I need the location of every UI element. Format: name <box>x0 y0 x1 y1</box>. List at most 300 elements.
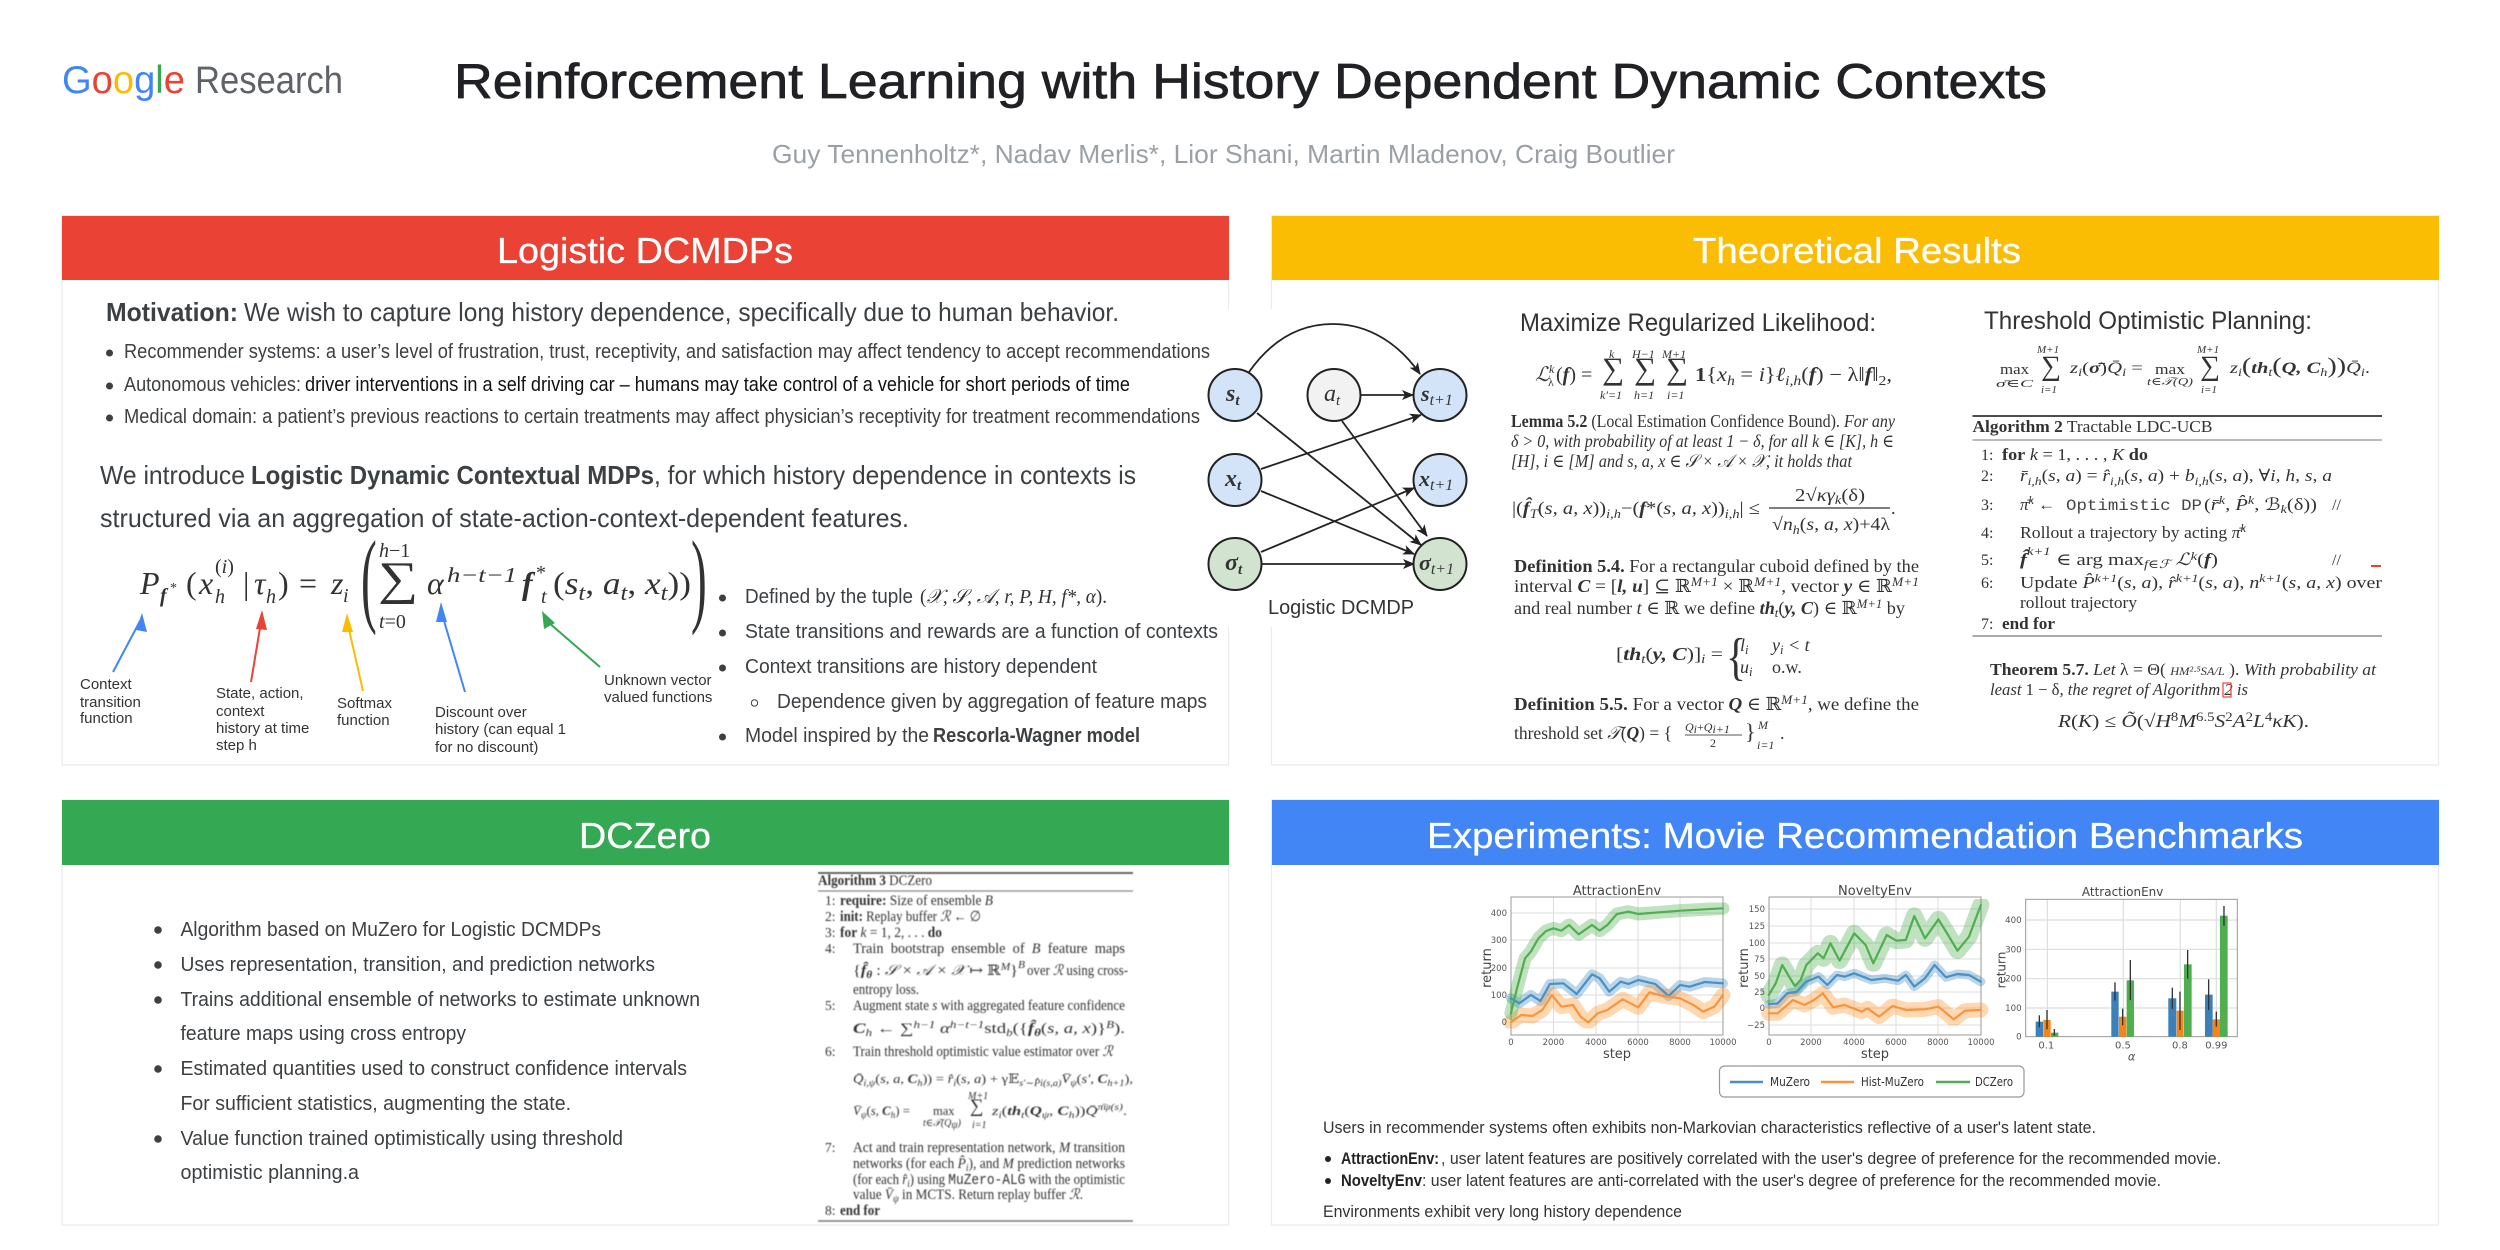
algorithm: Tractable LDC-UCB: k <box>2219 493 2226 507</box>
annotation: discount over history: for no discount) <box>435 739 538 756</box>
formula: threshold optimistic planning: t <box>2268 367 2273 379</box>
bullet list: motivation examples: Medical domain: a patient’s previous reactions to certain treatments may affect physician’s receptivity for treatment recommendations <box>124 406 1200 428</box>
algorithm: Tractable LDC-UCB: // <box>2332 497 2341 514</box>
heading: Theoretical Results: Theoretical Results <box>1693 230 2021 271</box>
bullet list: motivation examples: Autonomous vehicles: <box>124 374 301 396</box>
algorithm: Tractable LDC-UCB: π̄ <box>2020 495 2029 514</box>
text: Definition 5.4: M+1 <box>1856 597 1882 611</box>
text: Definition 5.4: and real number t ∈ ℝ we define th <box>1514 598 1775 618</box>
bar chart axis labels: 200 <box>2005 975 2022 985</box>
formula: threshold optimistic planning: i=1 <box>2201 384 2217 396</box>
line chart: AttractionEnv <box>1480 884 1737 1062</box>
algorithm: DCZero: ({ <box>1013 1021 1028 1037</box>
title: Reinforcement Learning with History Dependent Dynamic Contexts <box>454 55 2047 109</box>
algorithm: Tractable LDC-UCB: k+1 <box>2176 571 2198 585</box>
algorithm: DCZero: (for each r̂ <box>853 1172 908 1188</box>
algorithm: DCZero: Algorithm 3 DCZero <box>818 873 932 889</box>
text: Definition 5.4: M+1 <box>1753 575 1781 589</box>
algorithm: Tractable LDC-UCB: f) <box>2204 550 2217 569</box>
algorithm: DCZero: i <box>953 1078 957 1088</box>
algorithm: DCZero: max <box>933 1104 955 1118</box>
panel header: Logistic DCMDPs <box>62 216 1229 280</box>
line chart: AttractionEnv: 400 <box>1491 909 1507 919</box>
bar chart: AttractionEnv by alpha <box>1994 885 2237 1064</box>
algorithm: DCZero: f̂ <box>1028 1019 1037 1037</box>
algorithm: DCZero: s, a, C <box>880 1071 916 1086</box>
algorithm: DCZero: ) = <box>895 1103 910 1118</box>
bullet list: motivation examples <box>106 341 1210 428</box>
algorithm: Tractable LDC-UCB: k <box>2191 549 2198 563</box>
algorithm: DCZero: ψ <box>1070 1078 1077 1088</box>
bullet list: motivation examples: Recommender systems: a user’s level of frustration, trust, receptivity, and satisfaction may affect tendency to accept recommendations <box>124 341 1210 363</box>
algorithm: DCZero: entropy loss. <box>853 982 919 998</box>
line chart: NoveltyEnv: 6000 <box>1885 1038 1907 1048</box>
algorithm: DCZero: 8: <box>825 1203 836 1218</box>
algorithm: Tractable LDC-UCB: end for <box>2002 614 2055 633</box>
annotation: context transition function: function <box>80 710 133 727</box>
formula: threshold optimistic planning <box>1996 344 2370 396</box>
formula: threshold optimistic planning: M+1 <box>2196 344 2219 356</box>
algorithm: DCZero: ψ <box>893 1194 899 1205</box>
algorithm: DCZero: require: Size of ensemble B <box>840 893 993 909</box>
legend: MuZero <box>1770 1075 1810 1089</box>
line chart: NoveltyEnv: 100 <box>1749 939 1765 949</box>
algorithm: Tractable LDC-UCB: s, a), ∀i, h, s, a <box>2215 466 2324 485</box>
annotation: discount over history <box>435 704 566 756</box>
text: Definition 5.4: y ∈ ℝ <box>1844 576 1890 596</box>
text: introduction of Logistic Dynamic Contextual MDPs: Logistic Dynamic Contextual MDPs <box>251 460 654 490</box>
text: Definition 5.5: , we define the <box>1808 694 1919 714</box>
text: Lemma 5.2: [H], i ∈ [M] and s, a, x ∈ 𝒮 × 𝒜 × 𝒳, it holds that <box>1511 451 1853 471</box>
formula: context transition: h <box>215 586 225 608</box>
formula: threshold optimistic planning: ∑ <box>2200 351 2220 382</box>
graph node labels: t <box>1238 562 1243 578</box>
formula: threshold optimistic planning: max <box>2155 362 2186 378</box>
algorithm: DCZero: init: Replay buffer ℛ ← ∅ <box>840 909 981 925</box>
algorithm: DCZero: Q̄ <box>853 1071 864 1086</box>
bar chart axis labels <box>1994 885 2227 1064</box>
algorithm: Tractable LDC-UCB <box>1972 416 2382 636</box>
bullet list: DCZero: feature maps using cross entropy <box>180 1023 466 1045</box>
formula: threshold optimistic planning: M+1 <box>2036 344 2059 356</box>
arrow: state, action, context history <box>251 610 267 682</box>
algorithm: DCZero: ( <box>875 1071 880 1086</box>
text: Theorem 5.7: 6.5 <box>2196 710 2215 724</box>
algorithm: DCZero: h <box>1069 1110 1075 1120</box>
algorithm: Tractable LDC-UCB: f̂ <box>2020 549 2030 569</box>
algorithm: DCZero: θ <box>1034 1028 1042 1039</box>
formula: context transition: , <box>585 565 603 601</box>
formula: threshold vector: o.w. <box>1772 657 1802 677</box>
algorithm: Tractable LDC-UCB: 4: <box>1981 525 1993 542</box>
text: Definition 5.5: Q <box>1685 720 1694 734</box>
algorithm: Tractable LDC-UCB: s, a) + b <box>2131 466 2193 485</box>
formula: context transition: τ <box>254 565 267 601</box>
formula: confidence bound inequality: h <box>1793 523 1800 537</box>
line chart: AttractionEnv: 100 <box>1491 991 1507 1001</box>
text: experiment description: Users in recommender systems often exhibits non-Markovian characteristics reflective of a user's latent state. <box>1323 1118 2096 1137</box>
algorithm: DCZero: Q̄ <box>1085 1103 1098 1118</box>
bullet list: DCZero: optimistic planning.a <box>180 1162 360 1184</box>
formula: context transition: h−1 <box>379 540 410 562</box>
panel header: Experiments <box>1272 800 2439 865</box>
formula: regularized likelihood: ℒ <box>1535 364 1550 386</box>
text: Theorem 5.7: 2 <box>2225 710 2233 724</box>
algorithm: Tractable LDC-UCB: f∈ℱ <box>2144 557 2174 571</box>
algorithm: DCZero: Train threshold optimistic value estimator over ℛ <box>853 1044 1114 1060</box>
formula: threshold optimistic planning: z <box>2069 360 2079 377</box>
algorithm: DCZero: h−1 <box>913 1020 935 1031</box>
algorithm: DCZero: r̂ <box>948 1071 954 1086</box>
legend: Hist-MuZero <box>1861 1075 1924 1089</box>
formula: regularized likelihood: ∑ <box>1602 351 1624 386</box>
algorithm: DCZero: M <box>1000 962 1011 973</box>
graph node labels: σ <box>1225 550 1238 576</box>
formula: threshold optimistic planning: σ̄)Q̄ <box>2089 360 2119 377</box>
formula: context transition: a <box>603 565 621 601</box>
formula: context transition: * <box>536 562 546 584</box>
formula: context transition: ) <box>691 519 707 636</box>
algorithm: DCZero: ψ <box>951 1120 958 1131</box>
formula: confidence bound inequality: ( <box>1538 498 1545 519</box>
text: Definition 5.4: Definition 5.4. For a rectangular cuboid defined by the <box>1514 556 1919 576</box>
arrow: unknown vector valued functions <box>542 611 600 667</box>
formula: threshold optimistic planning: . <box>2365 360 2370 377</box>
text: Theorem 5.7: 8 <box>2171 710 2178 724</box>
formula: context transition: t <box>621 580 628 605</box>
line chart: NoveltyEnv: step <box>1861 1047 1889 1062</box>
text: experiment description: Environments exhibit very long history dependence <box>1323 1202 1682 1221</box>
legend: DCZero <box>1975 1075 2013 1089</box>
arrow: softmax function <box>342 613 363 691</box>
logo: Google Research <box>62 59 343 102</box>
algorithm: Tractable LDC-UCB: (r̄ <box>2204 495 2217 514</box>
algorithm: Tractable LDC-UCB: k <box>2241 521 2247 535</box>
algorithm: DCZero: ), <box>1124 1071 1133 1086</box>
bars: DCZero <box>2051 916 2228 1037</box>
formula: confidence bound inequality: i,h <box>1606 507 1621 521</box>
arrow: discount over history <box>436 602 465 692</box>
formula: threshold vector: i <box>1749 665 1753 679</box>
formula: threshold vector: t <box>1641 652 1646 666</box>
text: Definition 5.4: × ℝ <box>1718 576 1755 596</box>
formula: confidence bound inequality: |(f̂ <box>1512 498 1529 518</box>
formula: regularized likelihood: λ <box>1548 375 1554 389</box>
algorithm: DCZero: in MCTS. Return replay buffer <box>899 1187 1069 1203</box>
text: introduction of Logistic Dynamic Contextual MDPs: , for which history dependence in contexts is <box>654 460 1136 490</box>
algorithm: Tractable LDC-UCB: k+1 <box>2095 571 2117 585</box>
algorithm: DCZero: 4: <box>825 941 836 956</box>
text: motivation: Motivation: <box>106 297 238 327</box>
algorithm: DCZero: C <box>853 1021 866 1037</box>
formula: context transition: α <box>427 565 445 601</box>
formula: context transition: t <box>661 580 668 605</box>
line chart: NoveltyEnv: 4000 <box>1843 1038 1865 1048</box>
bar chart axis labels: 0.5 <box>2115 1040 2131 1051</box>
bullet list: model properties <box>719 586 1218 747</box>
bar chart axis labels: α <box>2128 1050 2136 1064</box>
formula: threshold vector: = <box>1705 644 1723 664</box>
bullet list: model properties: Dependence given by aggregation of feature maps <box>777 691 1207 713</box>
algorithm: DCZero: {f̂ <box>853 963 866 979</box>
panel: Logistic DCMDPs <box>62 216 1229 765</box>
formula: regularized likelihood: k <box>1549 362 1555 376</box>
formula: confidence bound inequality: ( <box>1800 514 1806 535</box>
line chart: AttractionEnv: return <box>1480 948 1495 988</box>
formula: context transition: f <box>522 565 536 601</box>
algorithm: DCZero: z <box>991 1103 998 1118</box>
algorithm: Tractable LDC-UCB: 7: <box>1981 616 1993 633</box>
algorithm: DCZero: ( <box>866 1103 871 1118</box>
algorithm: DCZero: ), and <box>969 1156 1003 1172</box>
subheading: maximize regularized likelihood: Maximize Regularized Likelihood: <box>1520 309 1876 337</box>
algorithm: Tractable LDC-UCB: ∈ arg max <box>2056 550 2128 569</box>
algorithm: DCZero: ← ∑ <box>872 1021 913 1037</box>
annotation: unknown vector valued functions <box>604 672 712 706</box>
algorithm: Tractable LDC-UCB: k+1 <box>2259 571 2282 585</box>
text: Theorem 5.7 <box>1990 660 2377 732</box>
formula: context transition: h−t−1 <box>447 563 517 587</box>
panel: Theoretical Results <box>1272 216 2439 765</box>
algorithm: Tractable LDC-UCB: r̄ <box>2020 466 2029 485</box>
algorithm: DCZero: s, a, x )} <box>1047 1021 1103 1037</box>
formula: threshold optimistic planning: i <box>2078 367 2082 379</box>
bullet list: model properties: (𝒳, 𝒮, 𝒜, r, P, H, f*, α). <box>920 586 1107 608</box>
text: Definition 5.4: y, C) ∈ ℝ <box>1784 598 1856 618</box>
algorithm: DCZero: i <box>966 1163 969 1174</box>
algorithm: DCZero: value V̄ <box>853 1187 894 1203</box>
algorithm: DCZero: s, C <box>871 1103 891 1118</box>
bullet list: DCZero: Estimated quantities used to construct confidence intervals <box>180 1058 687 1080</box>
algorithm: DCZero: : <box>872 963 885 979</box>
algorithm: DCZero: h <box>917 1078 923 1088</box>
formula: context transition: h <box>266 586 276 608</box>
bullet list: DCZero: Trains additional ensemble of networks to estimate unknown <box>180 989 700 1011</box>
line chart: NoveltyEnv: 125 <box>1749 922 1765 932</box>
algorithm: Tractable LDC-UCB: 2: <box>1981 468 1993 485</box>
annotation: softmax function <box>337 695 393 729</box>
formula: regularized likelihood: , <box>1886 364 1892 386</box>
formula: confidence bound inequality: . <box>1891 498 1896 518</box>
line chart: NoveltyEnv: 75 <box>1754 955 1765 965</box>
formula: context transition: ) <box>278 565 289 601</box>
formula: context transition: = <box>299 565 317 601</box>
formula: threshold vector: i <box>1701 652 1706 666</box>
annotation: state, action, context history: context <box>216 703 265 720</box>
formula: threshold optimistic planning: ( <box>2242 353 2251 378</box>
algorithm: Tractable LDC-UCB: 3: <box>1981 497 1993 514</box>
formula: threshold optimistic planning: )) <box>2327 353 2346 378</box>
formula: threshold vector: y <box>1772 635 1780 655</box>
algorithm: Tractable LDC-UCB: (δ)) <box>2287 495 2317 514</box>
algorithm: DCZero: MuZero-ALG with the optimistic <box>948 1172 1138 1189</box>
formula: threshold vector: l <box>1740 635 1745 655</box>
formula: threshold vector: i <box>1745 643 1749 657</box>
graph node labels: a <box>1324 381 1336 407</box>
algorithm: Tractable LDC-UCB: s, a), n <box>2205 573 2258 592</box>
formula: regularized likelihood: 2 <box>1879 374 1886 389</box>
algorithm: Tractable LDC-UCB: 1: <box>1981 447 1993 464</box>
algorithm: Tractable LDC-UCB: Algorithm 2 Tractable LDC-UCB <box>1972 417 2212 436</box>
formula: confidence bound inequality: −( <box>1621 498 1639 519</box>
line chart: NoveltyEnv: 2000 <box>1800 1038 1822 1048</box>
algorithm: DCZero: B <box>1106 1020 1114 1031</box>
text: Lemma 5.2: δ > 0, with probability of at least 1 − δ, for all k ∈ [K], h ∈ <box>1511 431 1894 451</box>
line chart: AttractionEnv: 200 <box>1491 964 1507 974</box>
line chart: NoveltyEnv: 0 <box>1760 1004 1765 1014</box>
authors: Guy Tennenholtz*, Nadav Merlis*, Lior Shani, Martin Mladenov, Craig Boutlier <box>772 139 1675 169</box>
algorithm: DCZero: i <box>907 1179 910 1190</box>
algorithm: DCZero: )) = <box>922 1071 948 1086</box>
algorithm: DCZero: i <box>998 1110 1002 1120</box>
algorithm: Tractable LDC-UCB: rollout trajectory <box>2020 593 2137 612</box>
line chart: NoveltyEnv <box>1737 884 1995 1062</box>
algorithm: DCZero: )) <box>1074 1103 1085 1118</box>
formula: confidence bound inequality: | ≤ <box>1740 498 1760 518</box>
bar chart axis labels: return <box>1994 952 2008 988</box>
formula: context transition <box>139 519 707 636</box>
algorithm: DCZero: π̄ψ(s) <box>1098 1102 1123 1112</box>
graph node labels: x <box>1419 466 1430 491</box>
algorithm: DCZero: 3: <box>825 925 836 940</box>
formula: regularized likelihood: 1{x <box>1695 364 1726 386</box>
algorithm: DCZero: ψ <box>1042 1110 1050 1120</box>
formula: regularized likelihood: ( <box>1801 364 1809 386</box>
panel header: Theoretical Results <box>1272 216 2439 280</box>
text: Definition 5.4: t <box>1775 606 1779 620</box>
heading: DCZero: DCZero <box>579 815 711 856</box>
algorithm: Tractable LDC-UCB: i,h <box>2028 474 2042 488</box>
text: Lemma 5.2 <box>1511 411 1895 471</box>
line chart: NoveltyEnv: 25 <box>1754 988 1765 998</box>
annotation: softmax function: function <box>337 712 390 729</box>
algorithm: Tractable LDC-UCB: 6: <box>1981 575 1993 592</box>
graph node labels: s <box>1226 381 1235 407</box>
graph nodes <box>1208 369 1466 590</box>
algorithm: DCZero: s′∼P̂i(s,a) <box>1019 1078 1061 1088</box>
formula: confidence bound inequality <box>1512 485 1896 537</box>
algorithm: DCZero: ). <box>1114 1021 1125 1037</box>
formula: regularized likelihood: ∑ <box>1666 351 1688 386</box>
line chart: NoveltyEnv: NoveltyEnv <box>1838 884 1912 899</box>
formula: threshold vector <box>1616 629 1811 686</box>
text: Definition 5.5: 2 <box>1710 736 1716 750</box>
annotation: discount over history: Discount over <box>435 704 527 721</box>
subheading: threshold optimistic planning: Threshold Optimistic Planning: <box>1984 307 2312 335</box>
formula: confidence bound inequality: i,h <box>1725 507 1740 521</box>
text: Definition 5.4: , vector <box>1781 576 1844 596</box>
bullet list: DCZero <box>154 919 700 1184</box>
algorithm: DCZero: V̄ <box>853 1103 863 1118</box>
text: experiment description: : user latent features are anti-correlated with the user's degree of preference for the recommended movie. <box>1422 1171 2161 1190</box>
formula: threshold optimistic planning: th <box>2251 360 2268 377</box>
annotation: unknown vector valued functions: valued functions <box>604 689 712 706</box>
formula: regularized likelihood: ∑ <box>1634 351 1656 386</box>
annotation: state, action, context history: step h <box>216 737 257 754</box>
formula: threshold vector: u <box>1740 657 1749 677</box>
graph node labels: t <box>1235 393 1240 409</box>
graph: Logistic DCMDP causal diagram <box>1208 309 1506 627</box>
text: introduction of Logistic Dynamic Contextual MDPs: We introduce <box>100 460 245 490</box>
formula: regularized likelihood: (f) = <box>1556 364 1592 386</box>
bar chart axis labels: 100 <box>2005 1004 2022 1014</box>
graph node labels: t <box>1336 393 1341 409</box>
formula: regularized likelihood: i}ℓ <box>1759 364 1784 386</box>
algorithm: Tractable LDC-UCB: , <box>2225 495 2235 514</box>
line chart: NoveltyEnv: 0 <box>1766 1038 1772 1048</box>
algorithm: DCZero <box>818 873 1133 1221</box>
text: Definition 5.4: by <box>1882 598 1905 618</box>
algorithm: DCZero: ( <box>1002 1103 1007 1118</box>
formula: threshold vector: y, C )] <box>1653 644 1699 664</box>
text: Theorem 5.7: L <box>2252 711 2265 731</box>
algorithm: DCZero: θ <box>866 970 873 981</box>
text: Definition 5.5: . <box>1780 723 1784 743</box>
text: introduction of Logistic Dynamic Contextual MDPs: structured via an aggregation of state-action-context-dependent features. <box>100 503 909 533</box>
algorithm: Tractable LDC-UCB: ( <box>2124 466 2131 485</box>
graph node labels: t+1 <box>1431 561 1454 578</box>
algorithm: Tractable LDC-UCB: 5: <box>1981 552 1993 569</box>
algorithm: DCZero: ( <box>1077 1071 1082 1086</box>
text: Theorem 5.7: ). <box>2297 711 2307 731</box>
formula: confidence bound inequality: s, a, x )) <box>1545 498 1604 518</box>
algorithm: DCZero: h+1 <box>1107 1078 1124 1088</box>
formula: context transition: x <box>644 565 661 601</box>
line chart: AttractionEnv: AttractionEnv <box>1573 884 1661 899</box>
annotation: context transition function: transition <box>80 694 141 711</box>
bars: Hist-MuZero <box>2043 1011 2220 1037</box>
text: Definition 5.4: M+1 <box>1690 575 1718 589</box>
graph node labels <box>1224 381 1454 578</box>
bullet list: model properties: Rescorla-Wagner model <box>933 725 1140 747</box>
formula: threshold optimistic planning: = <box>2126 360 2143 377</box>
algorithm: DCZero: i=1 <box>972 1120 987 1131</box>
algorithm: Tractable LDC-UCB: for k = 1, . . . , K do <box>2002 445 2148 464</box>
formula: regularized likelihood: M+1 <box>1661 347 1686 361</box>
bar chart axis labels: 0 <box>2016 1033 2022 1043</box>
annotation: context transition function: Context <box>80 676 133 693</box>
algorithm: DCZero: s, a) + γ𝔼 <box>961 1071 1015 1086</box>
algorithm: DCZero: 6: <box>825 1044 836 1059</box>
text: motivation: We wish to capture long history dependence, specifically due to human behavior. <box>244 297 1119 327</box>
algorithm: DCZero: V̄ <box>1061 1071 1073 1086</box>
line chart: AttractionEnv: 2000 <box>1543 1038 1564 1048</box>
algorithm: DCZero: i,ψ <box>864 1078 876 1088</box>
algorithm: Tractable LDC-UCB: k <box>2281 502 2288 516</box>
arrow: context transition function <box>113 613 147 672</box>
formula: regularized likelihood <box>1535 347 1892 402</box>
formula: regularized likelihood: i=1 <box>1667 388 1684 402</box>
bar chart axis labels: AttractionEnv <box>2082 885 2163 899</box>
text: Definition 5.4 <box>1514 556 1919 620</box>
algorithm: Tractable LDC-UCB: s, a) = r̂ <box>2048 466 2109 485</box>
panel header: DCZero <box>62 800 1229 865</box>
formula: context transition: )) <box>668 565 691 601</box>
algorithm: DCZero: , <box>1049 1103 1057 1118</box>
graph node labels: t <box>1237 478 1242 494</box>
formula: confidence bound inequality: √n <box>1772 514 1792 534</box>
formula: threshold vector: i <box>1780 643 1784 657</box>
algorithm: Tractable LDC-UCB: Optimistic DP <box>2066 497 2202 515</box>
logo: Google Research: Research <box>195 60 343 102</box>
error bars <box>2039 906 2224 1036</box>
formula: confidence bound inequality: (δ) <box>1841 485 1865 506</box>
text: experiment description: AttractionEnv: <box>1341 1149 1439 1168</box>
algorithm: DCZero: Act and train representation network, M transition <box>853 1140 1126 1156</box>
text: Theorem 5.7: 2 <box>2246 710 2253 724</box>
text: Theorem 5.7: 4 <box>2265 710 2273 724</box>
algorithm: Tractable LDC-UCB: k <box>2248 493 2255 507</box>
